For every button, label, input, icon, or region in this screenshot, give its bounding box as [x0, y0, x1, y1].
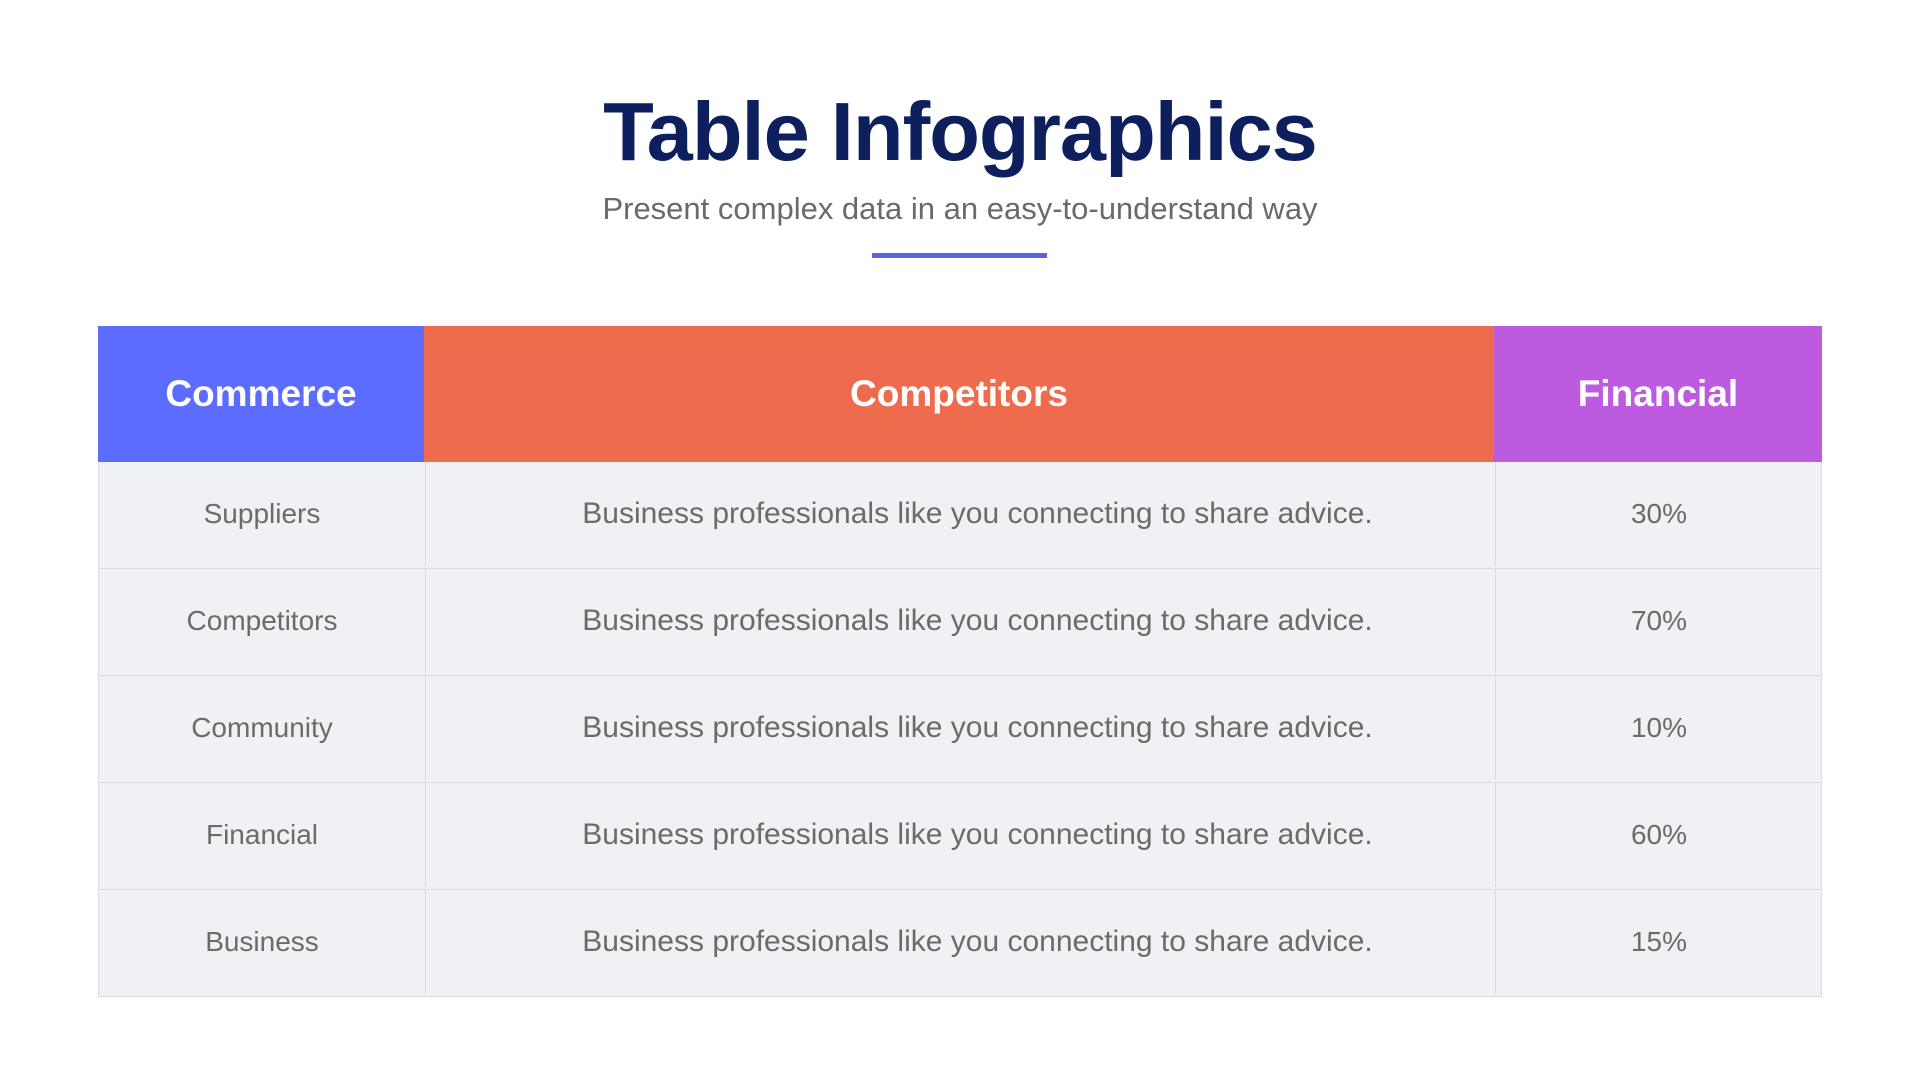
row: Community: Community [191, 712, 333, 743]
row: Suppliers [98, 462, 1822, 569]
table [98, 326, 1822, 997]
row: Competitors: Competitors [187, 605, 337, 636]
row: Business: Business professionals like you connecting to share advice. [582, 925, 1373, 958]
header: Competitors [424, 326, 1494, 462]
subtitle: Present complex data in an easy-to-understand way [602, 191, 1318, 226]
row: Business [98, 890, 1822, 997]
row: Community [98, 676, 1822, 783]
header: Commerce: Commerce [165, 373, 357, 414]
row: Financial [98, 783, 1822, 890]
underline accent [872, 253, 1047, 258]
row: Suppliers: 30% [1631, 498, 1687, 529]
row: Suppliers: Suppliers [204, 498, 320, 529]
row: Competitors: 70% [1631, 605, 1687, 636]
row: Financial: 60% [1631, 819, 1687, 850]
header: Financial: Financial [1578, 373, 1738, 414]
row: Community: 10% [1631, 712, 1687, 743]
row: Financial: Financial [206, 819, 318, 850]
header: Commerce [98, 326, 424, 462]
row: Business: Business [205, 926, 319, 957]
row: Competitors: Business professionals like you connecting to share advice. [582, 604, 1373, 637]
row: Community: Business professionals like you connecting to share advice. [582, 711, 1373, 744]
title: Table Infographics [603, 85, 1317, 178]
header: Financial [1494, 326, 1822, 462]
row: Suppliers: Business professionals like you connecting to share advice. [582, 497, 1373, 530]
row: Financial: Business professionals like you connecting to share advice. [582, 818, 1373, 851]
row: Business: 15% [1631, 926, 1687, 957]
row: Competitors [98, 569, 1822, 676]
header: Competitors: Competitors [850, 373, 1068, 414]
